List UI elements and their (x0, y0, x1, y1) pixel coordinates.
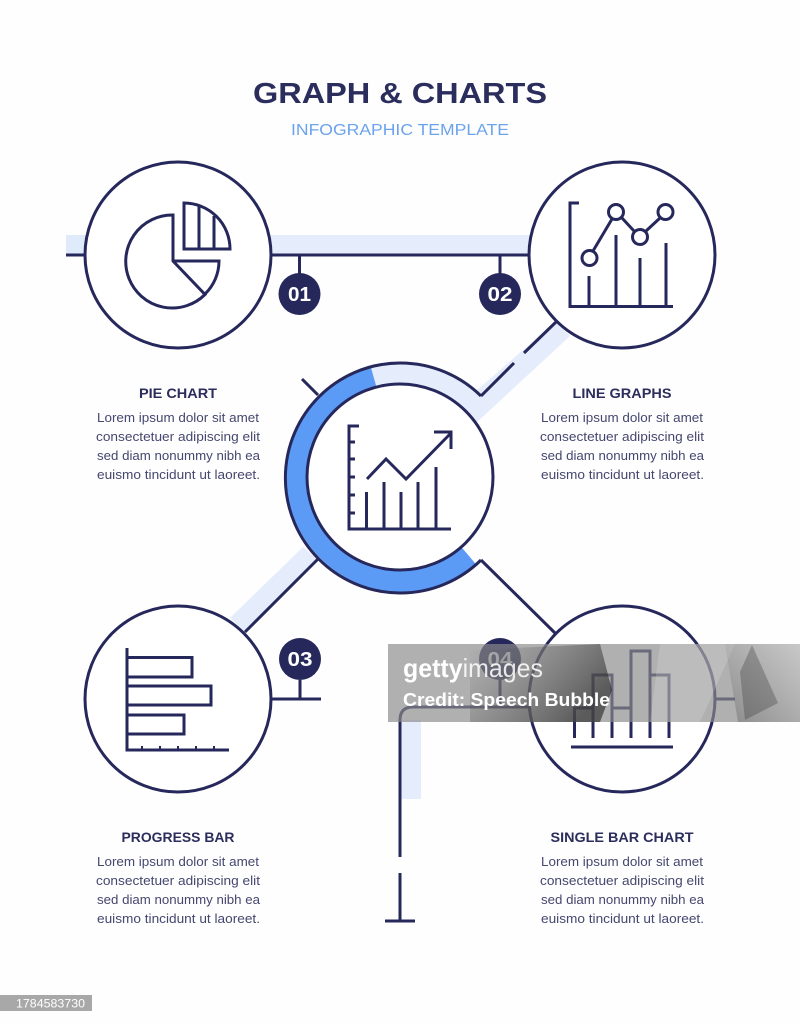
text block: line graphs: sed diam nonummy nibh ea (541, 449, 704, 463)
badge 04: 04 (488, 649, 513, 671)
text block: progress bar: consectetuer adipiscing elit (96, 874, 261, 888)
connector: bottom elbow line with stem (385, 707, 530, 921)
text block: pie chart: sed diam nonummy nibh ea (97, 449, 260, 463)
text block: line graphs: LINE GRAPHS (572, 385, 672, 401)
subtitle: INFOGRAPHIC TEMPLATE (291, 122, 509, 139)
badge 01 (278, 255, 320, 315)
text block: line graphs: Lorem ipsum dolor sit amet (541, 411, 704, 425)
connector: upper left tick (302, 379, 318, 395)
badge 03 (271, 638, 321, 699)
text block: progress bar: sed diam nonummy nibh ea (97, 893, 260, 907)
text block: progress bar (96, 829, 261, 926)
text block: pie chart: Lorem ipsum dolor sit amet (97, 411, 260, 425)
text block: single bar chart: Lorem ipsum dolor sit amet (541, 855, 704, 869)
text block: pie chart (96, 385, 261, 482)
center progress ring (285, 363, 493, 593)
text block: progress bar: Lorem ipsum dolor sit amet (97, 855, 260, 869)
connector: center to progress bar (230, 547, 318, 632)
watermark banner: gettyimages (403, 653, 543, 683)
icon: line graph (570, 203, 673, 306)
text block: single bar chart: euismo tincidunt ut laoreet. (541, 912, 704, 926)
text block: line graphs (540, 385, 705, 482)
text block: single bar chart: sed diam nonummy nibh ea (541, 893, 704, 907)
badge 04 (479, 638, 521, 707)
text block: progress bar: euismo tincidunt ut laoreet. (97, 912, 260, 926)
text block: line graphs: consectetuer adipiscing elit (540, 430, 705, 444)
circle: progress bar (85, 606, 271, 792)
badge 01: 01 (288, 284, 311, 306)
connector: right stub (715, 698, 735, 700)
text block: progress bar: PROGRESS BAR (122, 829, 234, 845)
title: GRAPH & CHARTS (253, 78, 547, 110)
badge 03: 03 (288, 649, 312, 671)
badge 02: 02 (488, 284, 512, 306)
icon: bar chart (571, 651, 673, 747)
text block: line graphs: euismo tincidunt ut laoreet. (541, 468, 704, 482)
text block: pie chart: euismo tincidunt ut laoreet. (97, 468, 260, 482)
text block: single bar chart: SINGLE BAR CHART (550, 829, 694, 845)
icon: trend chart (349, 426, 451, 529)
circle: single bar chart (529, 606, 715, 792)
image id tag: 1784583730 (16, 998, 85, 1010)
text block: pie chart: PIE CHART (139, 385, 217, 401)
text block: single bar chart (540, 829, 705, 926)
connector: center to single bar chart (481, 560, 556, 634)
circle: pie chart (85, 162, 271, 348)
text block: pie chart: consectetuer adipiscing elit (96, 430, 261, 444)
image id tag (0, 995, 92, 1011)
watermark banner (388, 644, 800, 722)
badge 02 (479, 255, 521, 315)
icon: pie chart (126, 203, 230, 308)
text block: single bar chart: consectetuer adipiscing elit (540, 874, 705, 888)
icon: progress bars (127, 648, 229, 750)
connector: center to line graphs (460, 322, 570, 423)
watermark banner: Credit: Speech Bubble (403, 689, 610, 710)
connector: top horizontal band with line (66, 235, 531, 255)
circle: line graphs (529, 162, 715, 348)
